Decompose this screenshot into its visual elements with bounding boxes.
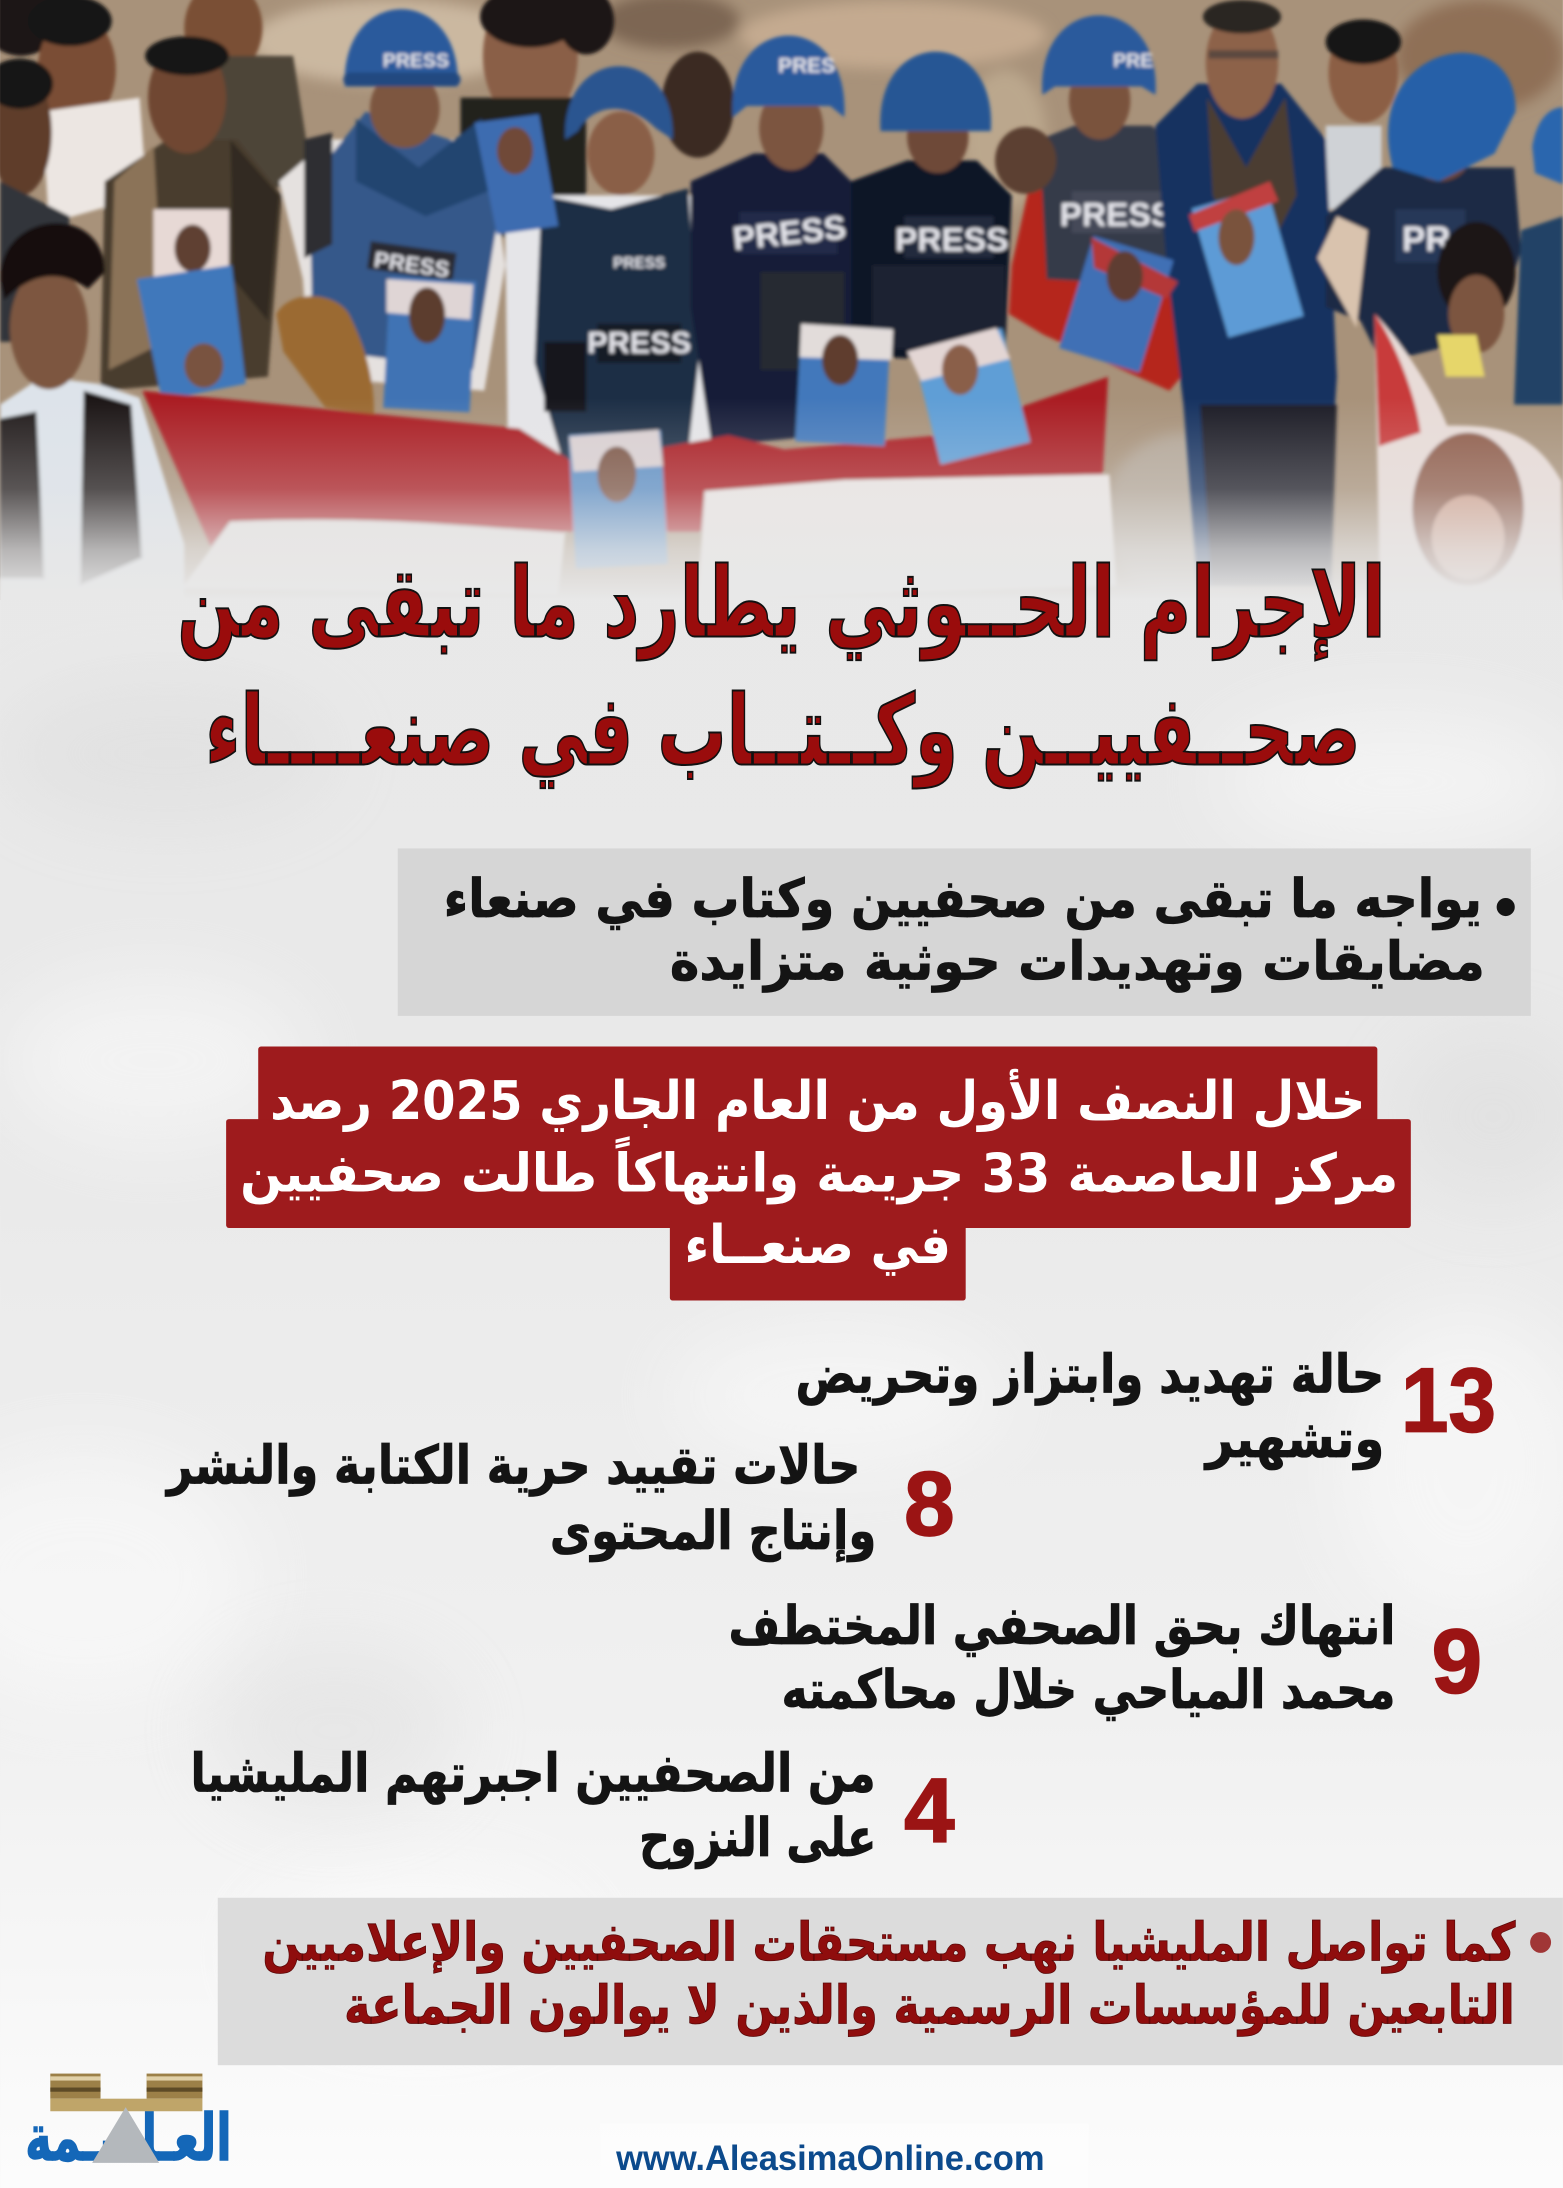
journalist in blue helmet and vest: PRESS: [383, 50, 449, 72]
back row men: [0, 0, 1401, 342]
scarf bundle: [276, 296, 374, 414]
stat: 4 displaced: [191, 1743, 955, 1869]
stat: 8 restrictions: 8: [904, 1454, 955, 1555]
stat: 13 threats: وتشهير: [1203, 1408, 1384, 1470]
stat: 4 displaced: 4: [904, 1761, 955, 1862]
panel: intro statement: [398, 848, 1531, 1016]
man in camo scarf: [101, 36, 282, 400]
fade into page: [0, 398, 1563, 600]
journalist in grey vest with red sleeves: PRE: [1113, 50, 1153, 72]
stat: 9 violations: [728, 1595, 1482, 1721]
man with glasses in navy jacket: [1155, 0, 1337, 586]
stat: 4 displaced: من الصحفيين اجبرتهم المليشيا: [191, 1743, 876, 1805]
journalist with navy vest: [691, 36, 865, 447]
stat: 9 violations: 9: [1432, 1612, 1482, 1713]
posters held up: [383, 181, 1304, 569]
journalist in dark vest: PRESS: [895, 222, 1008, 259]
stat: 4 displaced: على النزوح: [639, 1807, 876, 1869]
flag: [142, 314, 1562, 607]
website address: [600, 2124, 1088, 2188]
journalist with navy vest: PRES: [778, 55, 835, 78]
intro text: يواجه ما تبقى من صحفيين وكتاب في صنعاء: [444, 868, 1482, 930]
stat: 13 threats: [795, 1344, 1496, 1470]
stat: 9 violations: محمد المياحي خلال محاكمته: [781, 1659, 1395, 1721]
bullet: [1530, 1932, 1551, 1953]
journalist in white shirt and navy vest: PRESS: [613, 255, 665, 272]
stat: 8 restrictions: وإنتاج المحتوى: [550, 1500, 876, 1562]
website address: www.AleasimaOnline.com: [615, 2139, 1045, 2178]
journalist in blue helmet and vest: [279, 9, 505, 391]
journalist in dark vest: [851, 52, 1012, 363]
intro text: [444, 868, 1485, 993]
panel: red callout: خلال النصف الأول من العام الجاري 2025 رصد: [270, 1068, 1365, 1132]
panel: red callout: [226, 1047, 1411, 1301]
journalist with navy vest: PRESS: [731, 209, 848, 258]
stat: 13 threats: 13: [1401, 1351, 1496, 1452]
journalist in grey vest with red sleeves: PRESS: [1060, 197, 1173, 234]
boy in foreground: [0, 223, 184, 600]
journalist at right with blue helmet: PR: [1402, 220, 1450, 259]
bullet: [1497, 898, 1515, 916]
logo: Al-Asima: [25, 2074, 232, 2176]
panel: red callout: في صنعــاء: [685, 1214, 951, 1276]
journalist at right with blue helmet: [1317, 53, 1563, 405]
photo background: dry hillside: [0, 0, 1563, 600]
panel: red callout: مركز العاصمة 33 جريمة وانتهاكاً طالت صحفيين: [240, 1136, 1398, 1205]
intro text: مضايقات وتهديدات حوثية متزايدة: [670, 931, 1485, 993]
journalist in blue helmet and vest: PRESS: [373, 247, 451, 282]
title: [177, 546, 1386, 789]
journalist in white shirt and navy vest: [502, 64, 714, 461]
logo: Al-Asima: العـاصـمة: [25, 2101, 232, 2176]
poster: behind shoulder: [475, 114, 558, 234]
journalist in grey vest with red sleeves: [995, 15, 1204, 391]
panel: closing statement: [218, 1898, 1563, 2065]
stat: 9 violations: انتهاك بحق الصحفي المختطف: [728, 1595, 1395, 1657]
stat: 8 restrictions: [164, 1434, 955, 1562]
journalist in white shirt and navy vest: PRESS: [587, 325, 691, 360]
stat: 13 threats: حالة تهديد وابتزاز وتحريض: [795, 1344, 1384, 1406]
photo: journalists in press vests holding posters and a Yemeni flag: [0, 0, 1563, 607]
stat: 8 restrictions: حالات تقييد حرية الكتابة والنشر: [164, 1434, 860, 1496]
